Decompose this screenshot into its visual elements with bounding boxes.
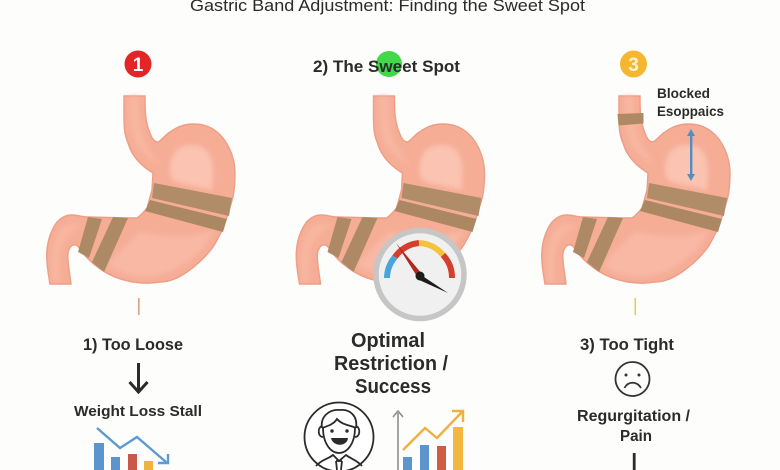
label: blocked esophagus: Blocked [657,86,710,101]
label: regurgitation pain [577,408,691,445]
badge 1: 1 [133,55,144,76]
label: optimal restriction success: Success [355,376,431,398]
label: regurgitation pain: Pain [620,428,652,445]
badge 2 [376,51,402,77]
arrow: down [130,363,148,392]
label: optimal restriction success: Restriction / [334,353,448,375]
chart: declining bars [94,428,168,470]
arrow: down cut off [633,453,636,470]
label: too loose: 1) Too Loose [83,335,183,354]
panel: too loose [47,50,235,470]
heading: the sweet spot: 2) The Sweet Spot [313,57,460,76]
label: too tight: 3) Too Tight [580,335,674,354]
connector tick 1 [138,298,140,315]
icon: smiling person [304,402,374,470]
chart: rising bars [393,411,463,470]
icon: sad face [616,362,650,396]
badge 1 [124,50,152,78]
label: blocked esophagus [657,86,724,119]
esophagus band [618,113,644,126]
badge 3: 3 [628,55,639,76]
stomach with tight band [542,96,730,284]
gauge [376,230,464,318]
arrow: double blue [687,129,695,181]
label: optimal restriction success: Optimal [351,330,425,352]
label: weight loss stall: Weight Loss Stall [74,403,202,420]
stomach with loose band [47,96,235,284]
connector tick 3 [634,298,636,315]
panel: sweet spot [296,51,484,470]
label: regurgitation pain: Regurgitation / [577,408,691,425]
badge 3 [620,50,647,78]
label: optimal restriction success [334,330,448,398]
label: blocked esophagus: Esoppaics [657,104,724,119]
stomach with optimal band [296,96,484,284]
panel: too tight [542,50,730,470]
